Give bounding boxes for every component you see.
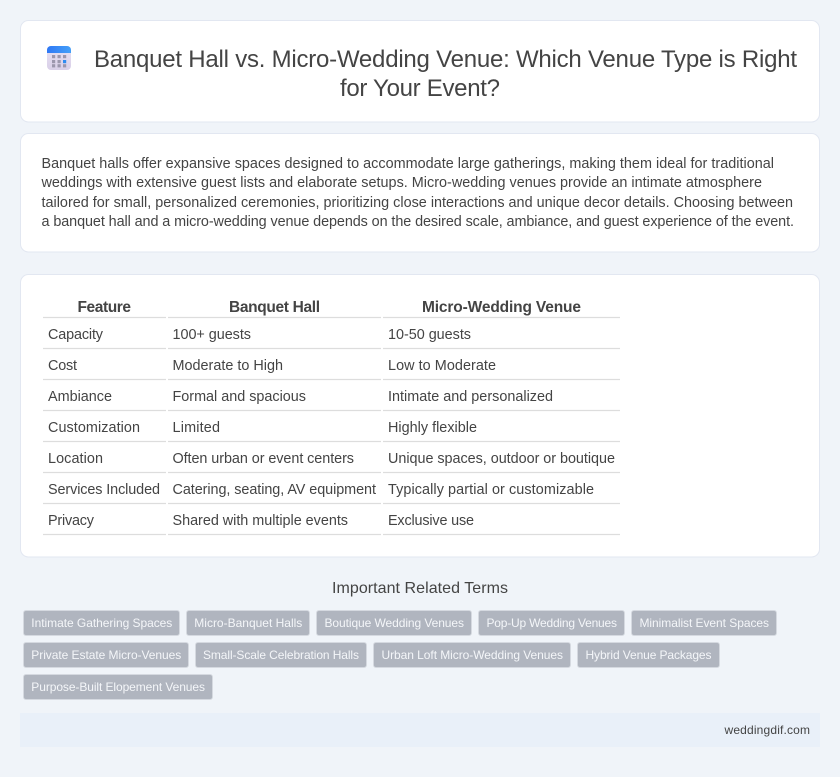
tag bbox=[24, 642, 188, 668]
table row: services included: Catering, seating, AV equipment bbox=[172, 482, 376, 498]
table row: capacity: 10-50 guests bbox=[388, 327, 471, 343]
table row: services included: Services Included bbox=[48, 482, 160, 498]
tag bbox=[632, 610, 776, 636]
tag bbox=[316, 610, 472, 636]
tag: Boutique Wedding Venues bbox=[324, 616, 464, 630]
tag: Urban Loft Micro-Wedding Venues bbox=[382, 648, 563, 662]
tag: Minimalist Event Spaces bbox=[640, 616, 769, 630]
table row: ambiance bbox=[48, 389, 553, 405]
panel: comparison table bbox=[20, 274, 820, 557]
table row: location: Unique spaces, outdoor or boutique bbox=[388, 451, 615, 467]
panel: title card bbox=[20, 20, 820, 122]
footer source text: weddingdif.com bbox=[724, 723, 810, 737]
table row: privacy bbox=[48, 513, 474, 529]
panel: introduction bbox=[20, 134, 820, 252]
tag: Intimate Gathering Spaces bbox=[31, 616, 172, 630]
table row: capacity bbox=[48, 327, 471, 343]
table row: privacy: Privacy bbox=[48, 513, 95, 529]
table row: ambiance: Formal and spacious bbox=[172, 389, 306, 405]
table row: location: Often urban or event centers bbox=[172, 451, 354, 467]
text block: introduction paragraph: tailored for small, personalized ceremonies, prioritizing close interactions and unique decor details. Choosing between bbox=[42, 195, 793, 211]
heading: title: for Your Event? bbox=[340, 75, 500, 102]
tag: Pop-Up Wedding Venues bbox=[486, 616, 617, 630]
table header bbox=[78, 299, 581, 316]
heading: title: Banquet Hall vs. Micro-Wedding Venue: Which Venue Type is Right bbox=[94, 46, 797, 73]
table header: Micro-Wedding Venue bbox=[422, 299, 581, 316]
table row: cost: Cost bbox=[48, 358, 77, 374]
table row: cost: Moderate to High bbox=[172, 358, 283, 374]
table row: location: Location bbox=[48, 451, 103, 467]
tag bbox=[374, 642, 570, 668]
table header: Feature bbox=[78, 299, 131, 316]
footer bbox=[20, 713, 820, 747]
table row: services included: Typically partial or customizable bbox=[388, 482, 594, 498]
table row: cost bbox=[48, 358, 496, 374]
table row: capacity: 100+ guests bbox=[172, 327, 251, 343]
table row: customization bbox=[48, 420, 477, 436]
table row: privacy: Exclusive use bbox=[388, 513, 474, 529]
tag: Micro-Banquet Halls bbox=[194, 616, 302, 630]
table row: location bbox=[48, 451, 615, 467]
heading: important related terms: Important Related Terms bbox=[332, 580, 508, 597]
tag bbox=[186, 610, 310, 636]
text block: introduction paragraph: weddings with extensive guest lists and elaborate setups. Micro-wedding venues provide an intimate atmosphere bbox=[40, 175, 762, 191]
related term tags bbox=[24, 610, 776, 700]
tag bbox=[24, 610, 180, 636]
tag: Hybrid Venue Packages bbox=[586, 648, 712, 662]
text block: introduction paragraph bbox=[40, 156, 794, 230]
tag: Private Estate Micro-Venues bbox=[31, 648, 181, 662]
table row: cost: Low to Moderate bbox=[388, 358, 496, 374]
tag: Purpose-Built Elopement Venues bbox=[31, 680, 205, 694]
heading: title bbox=[94, 46, 797, 102]
icon: calendar bbox=[47, 46, 71, 70]
table row: customization: Customization bbox=[48, 420, 140, 436]
table row: capacity: Capacity bbox=[48, 327, 104, 343]
text block: introduction paragraph: Banquet halls offer expansive spaces designed to accommodate large gatherings, making them ideal for traditional bbox=[42, 156, 774, 172]
tag bbox=[578, 642, 720, 668]
tag bbox=[478, 610, 624, 636]
table header: Banquet Hall bbox=[229, 299, 320, 316]
tag bbox=[24, 674, 212, 700]
tag: Small-Scale Celebration Halls bbox=[203, 648, 359, 662]
table row: customization: Limited bbox=[172, 420, 220, 436]
table row: privacy: Shared with multiple events bbox=[172, 513, 348, 529]
table row: customization: Highly flexible bbox=[388, 420, 477, 436]
table row: ambiance: Ambiance bbox=[48, 389, 112, 405]
text block: introduction paragraph: a banquet hall and a micro-wedding venue depends on the desired scale, ambiance, and guest experience of the event. bbox=[42, 214, 794, 230]
table row: services included bbox=[48, 482, 594, 498]
table row: ambiance: Intimate and personalized bbox=[388, 389, 553, 405]
tag bbox=[196, 642, 366, 668]
